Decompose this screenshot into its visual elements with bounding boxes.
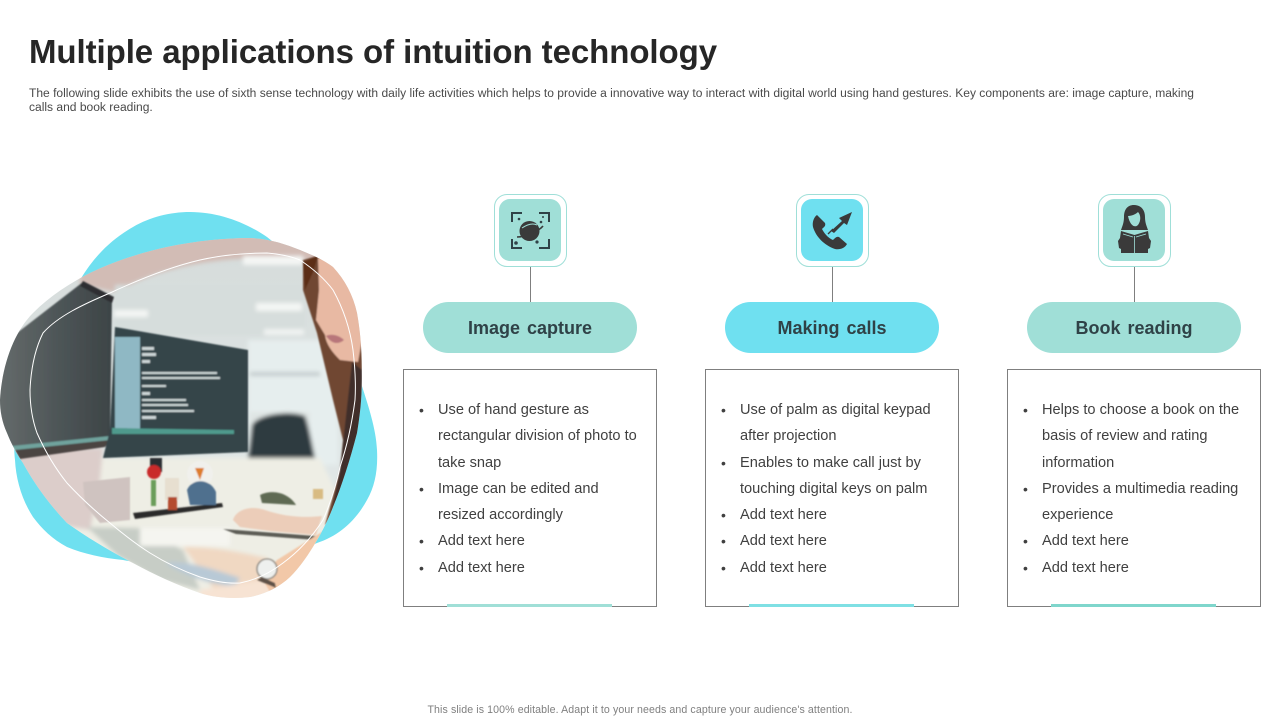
accent bar xyxy=(447,604,612,607)
bullet list: Use of hand gesture as xyxy=(438,402,589,418)
heading pill: Image capture xyxy=(468,318,592,338)
column: making calls xyxy=(705,194,959,607)
woman xyxy=(303,255,362,525)
icon: phone with arrow xyxy=(796,194,869,267)
bullet list: Add text here xyxy=(438,533,525,549)
connector xyxy=(530,267,531,302)
bullet list: Add text here xyxy=(1042,533,1129,549)
bullet list: Add text here xyxy=(740,560,827,576)
arm and watch xyxy=(266,531,322,591)
bullet list: Image can be edited and xyxy=(438,481,599,497)
title: Multiple applications of intuition technology xyxy=(29,33,717,70)
bullet list: Add text here xyxy=(1042,560,1129,576)
bullet list xyxy=(1024,402,1239,576)
hand xyxy=(233,508,322,535)
description text xyxy=(29,86,1194,114)
connector xyxy=(1134,267,1135,302)
bullet list xyxy=(420,402,637,576)
bullet list: touching digital keys on palm xyxy=(740,481,927,497)
right monitor xyxy=(103,327,248,458)
text box xyxy=(1007,369,1261,607)
white outline blob xyxy=(30,253,355,583)
icon: person reading book xyxy=(1098,194,1171,267)
bullet list xyxy=(722,402,931,576)
bullet list: resized accordingly xyxy=(438,507,563,523)
description text: The following slide exhibits the use of sixth sense technology with daily life activities which helps to provide a innovative way to interact with digital world using hand gestures. Key components are: image capture, making xyxy=(29,86,1194,100)
bullet list: after projection xyxy=(740,428,837,444)
heading pill xyxy=(423,302,637,353)
desk objects xyxy=(133,503,223,519)
column: book reading xyxy=(1007,194,1261,607)
text box xyxy=(403,369,657,607)
heading pill xyxy=(725,302,939,353)
footer note: This slide is 100% editable. Adapt it to your needs and capture your audience's attention. xyxy=(427,704,853,716)
bullet list: Add text here xyxy=(438,560,525,576)
description text: calls and book reading. xyxy=(29,100,153,114)
photo blob illustration xyxy=(0,212,378,598)
bullet list: Use of palm as digital keypad xyxy=(740,402,931,418)
office photo xyxy=(0,230,380,610)
heading pill xyxy=(1027,302,1241,353)
bullet list: basis of review and rating xyxy=(1042,428,1207,444)
bullet list: Provides a multimedia reading xyxy=(1042,481,1238,497)
bullet list: experience xyxy=(1042,507,1113,523)
bullet list: Add text here xyxy=(740,507,827,523)
heading pill: Book reading xyxy=(1075,318,1192,338)
bullet list: Helps to choose a book on the xyxy=(1042,402,1239,418)
accent bar xyxy=(749,604,914,607)
bullet list: Add text here xyxy=(740,533,827,549)
bullet list: rectangular division of photo to xyxy=(438,428,637,444)
icon: planet in viewfinder xyxy=(494,194,567,267)
bullet list: Enables to make call just by xyxy=(740,455,921,471)
accent bar xyxy=(1051,604,1216,607)
column: image capture xyxy=(403,194,657,607)
text box xyxy=(705,369,959,607)
heading pill: Making calls xyxy=(777,318,887,338)
left monitor xyxy=(0,282,112,447)
connector xyxy=(832,267,833,302)
bullet list: take snap xyxy=(438,455,501,471)
cyan blob xyxy=(14,212,377,567)
bullet list: information xyxy=(1042,455,1114,471)
